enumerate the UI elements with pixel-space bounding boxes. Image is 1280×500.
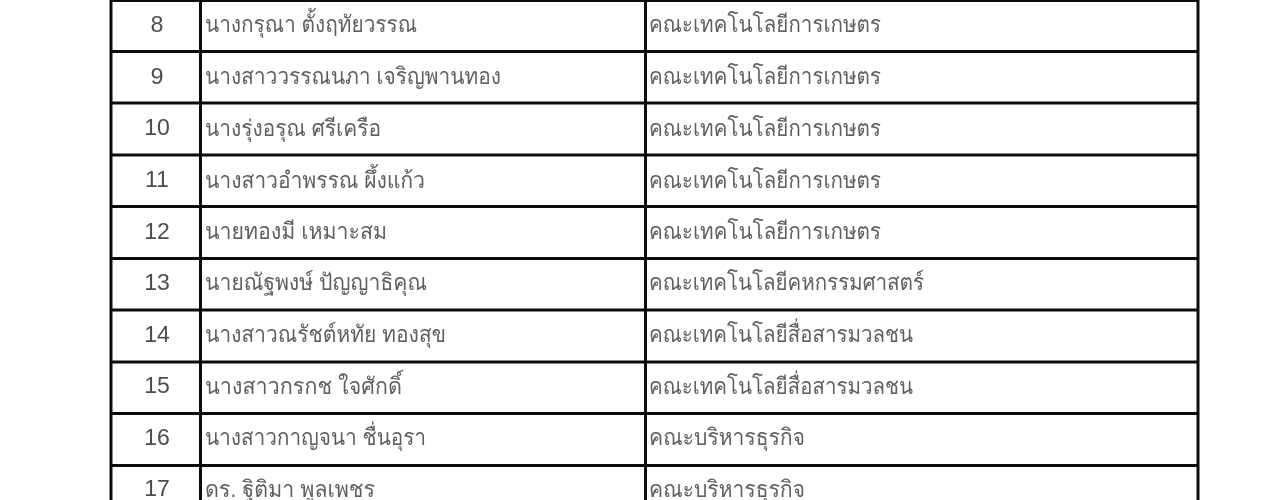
- row 9: [151, 63, 881, 89]
- row 11: นางสาวอำพรรณ ผึ้งแก้ว: [205, 164, 425, 193]
- row 11: [145, 164, 881, 193]
- row 15: [144, 369, 913, 399]
- row 10: คณะเทคโนโลยีการเกษตร: [649, 115, 881, 141]
- row 8: [151, 8, 881, 38]
- row 9: นางสาววรรณนภา เจริญพานทอง: [205, 63, 501, 89]
- row 13: [144, 269, 924, 296]
- row 14: นางสาวณรัชต์หทัย ทองสุข: [205, 321, 446, 348]
- row 14: [144, 318, 913, 348]
- row 16: คณะบริหารธุรกิจ: [649, 424, 805, 451]
- row 15: นางสาวกรกช ใจศักดิ์: [205, 369, 404, 399]
- row 12: นายทองมี เหมาะสม: [205, 218, 387, 244]
- row 13: 13: [144, 269, 170, 295]
- row 8: นางกรุณา ตั้งฤทัยวรรณ: [205, 8, 417, 38]
- row 10: [144, 114, 881, 142]
- row 15: 15: [144, 372, 170, 398]
- row 17: [144, 475, 805, 500]
- row 16: [144, 421, 805, 451]
- row 9: คณะเทคโนโลยีการเกษตร: [649, 63, 881, 89]
- row 11: คณะเทคโนโลยีการเกษตร: [649, 167, 881, 193]
- row 14: คณะเทคโนโลยีสื่อสารมวลชน: [649, 318, 913, 347]
- row 12: คณะเทคโนโลยีการเกษตร: [649, 218, 881, 244]
- row 16: นางสาวกาญจนา ชื่นอุรา: [205, 421, 426, 451]
- row 12: [144, 218, 881, 244]
- row 10: นางรุ่งอรุณ ศรีเครือ: [205, 115, 381, 142]
- row 8: 8: [151, 11, 163, 37]
- row 15: คณะเทคโนโลยีสื่อสารมวลชน: [649, 370, 913, 399]
- row 11: 11: [145, 166, 169, 192]
- row 8: คณะเทคโนโลยีการเกษตร: [649, 11, 881, 37]
- row 12: 12: [144, 218, 170, 244]
- row 13: นายณัฐพงษ์ ปัญญาธิคุณ: [205, 269, 427, 296]
- row 13: คณะเทคโนโลยีคหกรรมศาสตร์: [649, 269, 924, 295]
- row 10: 10: [144, 114, 170, 140]
- row 9: 9: [151, 63, 163, 89]
- row 16: 16: [144, 424, 170, 450]
- row 14: 14: [144, 321, 170, 347]
